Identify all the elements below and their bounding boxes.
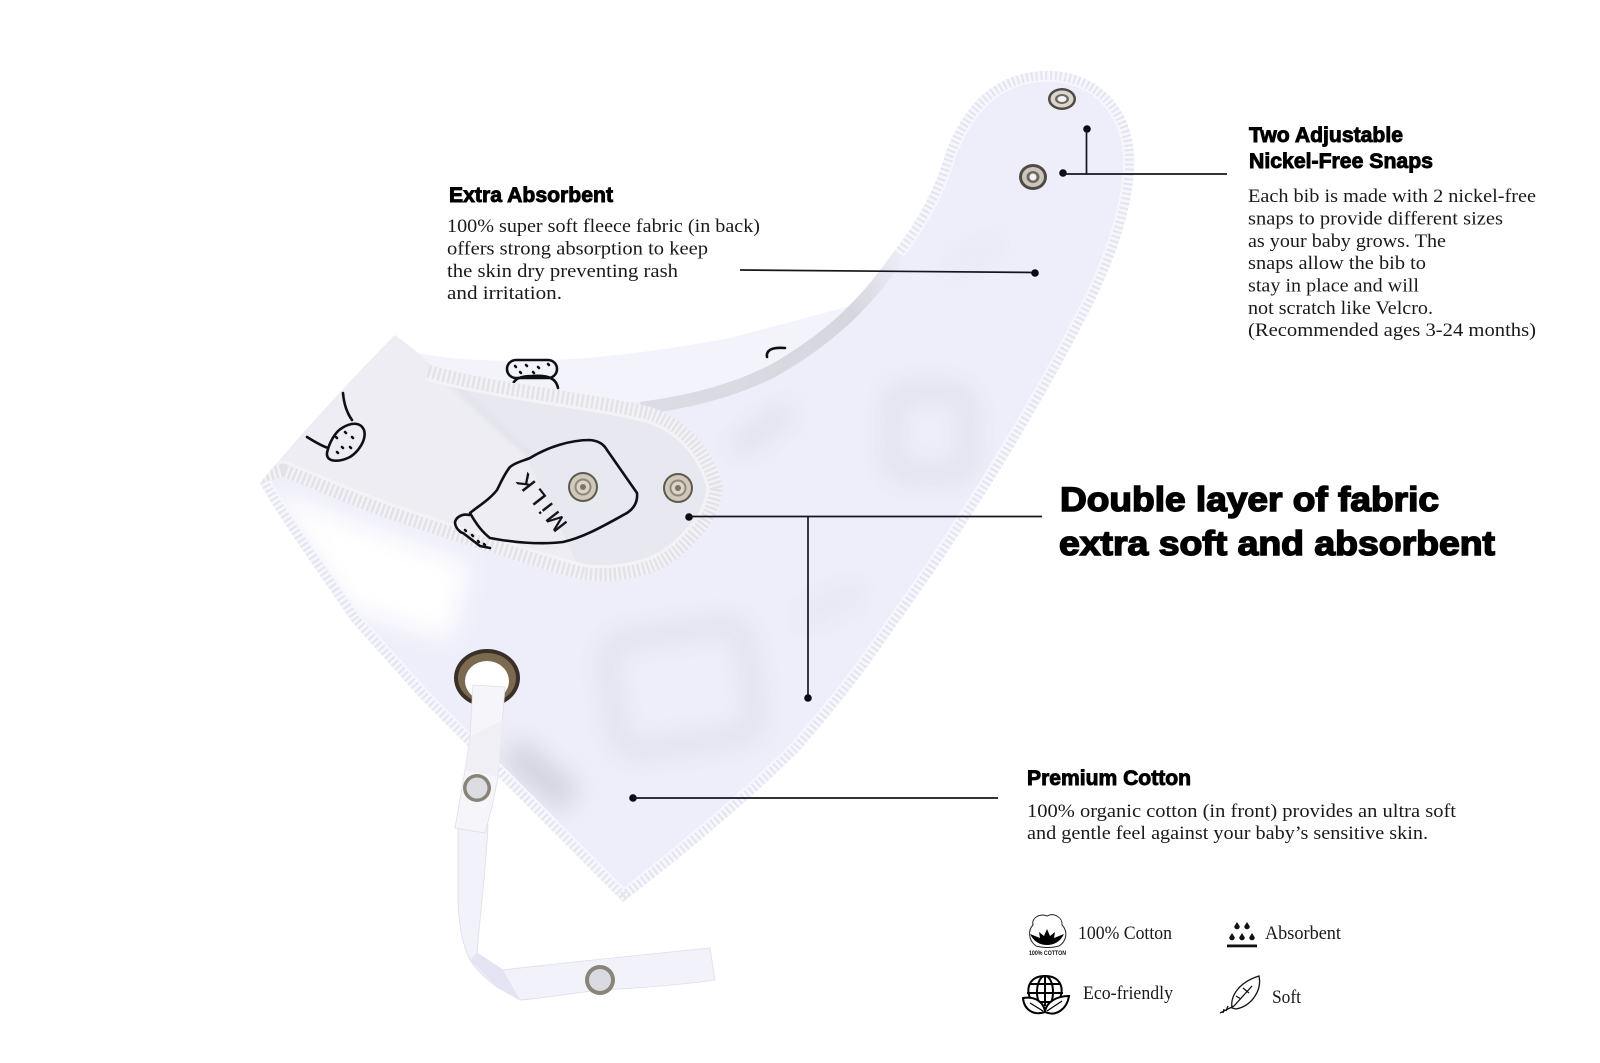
- headline: double layer: Double layer of fabric: [1060, 481, 1439, 519]
- leader line: premium cotton: [629, 794, 998, 802]
- icon: eco-friendly globe and leaves: [1023, 976, 1069, 1014]
- text block: premium cotton: and gentle feel against your baby’s sensitive skin.: [1027, 823, 1428, 844]
- front fabric body: [240, 60, 1150, 920]
- text block: premium cotton: [1027, 767, 1457, 844]
- text block: extra absorbent: 100% super soft fleece fabric (in back): [447, 216, 760, 237]
- leader line: extra absorbent: [740, 269, 1039, 277]
- text block: adjustable snaps: Each bib is made with 2 nickel-free: [1248, 186, 1536, 207]
- text block: adjustable snaps: Two Adjustable: [1249, 124, 1403, 147]
- printed cap on back layer: [507, 348, 785, 388]
- icon: cotton: [1029, 915, 1066, 957]
- text block: adjustable snaps: [1248, 124, 1536, 341]
- text block: adjustable snaps: snaps allow the bib to: [1248, 253, 1426, 274]
- flap snap left: [568, 472, 598, 502]
- ribbon snap lower: [585, 965, 615, 995]
- text block: adjustable snaps: stay in place and will: [1248, 276, 1419, 296]
- milk bottle print: MiLK: [511, 469, 572, 536]
- white area under the fold: [288, 503, 465, 634]
- neck stitched edge: [640, 250, 895, 402]
- bib illustration: [240, 60, 1150, 1000]
- folded flap: [260, 335, 723, 581]
- text block: extra absorbent: [447, 184, 760, 304]
- text block: adjustable snaps: Nickel-Free Snaps: [1249, 150, 1433, 173]
- strap snap top: [1048, 88, 1076, 110]
- back layer behind the fold: [417, 306, 862, 420]
- label: cotton: 100% Cotton: [1078, 924, 1172, 944]
- text block: extra absorbent: and irritation.: [447, 283, 562, 304]
- label: absorbent: Absorbent: [1265, 924, 1342, 944]
- flap snap right: [663, 473, 693, 503]
- ribbon tether: [455, 685, 715, 1000]
- text block: adjustable snaps: (Recommended ages 3-24 months): [1248, 320, 1536, 341]
- infographic canvas: [260, 71, 1536, 1015]
- text block: adjustable snaps: snaps to provide different sizes: [1248, 208, 1503, 230]
- leader line: snaps: [1059, 125, 1227, 177]
- headline: double layer: [1059, 481, 1495, 563]
- leader line: double layer: [685, 513, 1042, 702]
- label: eco-friendly: Eco-friendly: [1083, 984, 1174, 1004]
- text block: premium cotton: Premium Cotton: [1027, 767, 1191, 790]
- overlock stitched edge: [498, 451, 999, 832]
- text block: extra absorbent: offers strong absorption to keep: [447, 238, 708, 260]
- ribbon snap upper: [463, 774, 491, 802]
- icon: absorbent drops: [1227, 922, 1257, 947]
- strap snap lower: [1019, 164, 1047, 190]
- text block: premium cotton: 100% organic cotton (in front) provides an ultra soft: [1027, 801, 1457, 822]
- icon: soft feather: [1220, 976, 1260, 1013]
- text block: adjustable snaps: not scratch like Velcro.: [1248, 298, 1433, 319]
- icon: cotton: 100% COTTON: [1029, 950, 1066, 957]
- text block: extra absorbent: the skin dry preventing rash: [447, 261, 679, 282]
- headline: double layer: extra soft and absorbent: [1059, 525, 1495, 563]
- faint print shadows: [501, 394, 966, 812]
- bear print on flap: [307, 393, 365, 461]
- label: soft: Soft: [1272, 988, 1302, 1008]
- text block: extra absorbent: Extra Absorbent: [449, 184, 613, 207]
- milk bottle print: [455, 440, 637, 548]
- grommet: [454, 649, 520, 707]
- text block: adjustable snaps: as your baby grows. The: [1248, 231, 1446, 252]
